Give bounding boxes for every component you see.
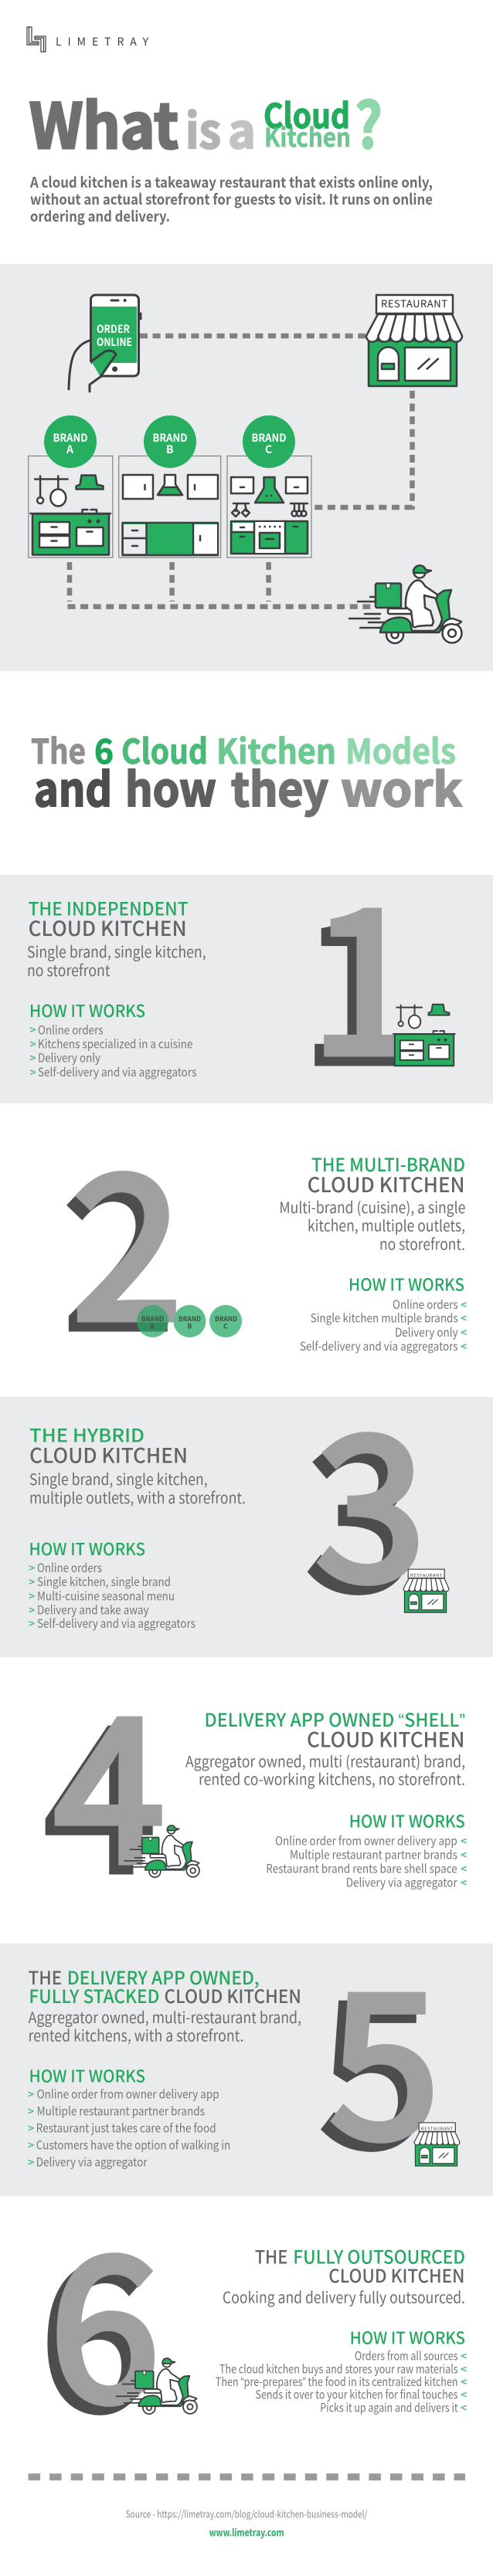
how it works list: < [461,2361,467,2377]
number 1: 1 [301,832,411,1120]
heading: delivery app owned shell: DELIVERY APP OWNED “SHELL” [204,1705,465,1732]
how it works list: < [461,1833,467,1849]
number 3: 3 [306,1359,416,1647]
how it works list: > [29,1022,36,1038]
how it works list: HOW IT WORKS [350,2324,465,2349]
title: What is a Cloud Kitchen?: ? [355,75,382,167]
description: Single brand, single kitchen, [27,940,206,962]
how it works list [266,1808,467,1890]
icon: restaurant [403,1569,449,1612]
how it works list: Online order from owner delivery app [275,1832,457,1849]
how it works list: < [461,1325,467,1341]
brand badges: B [187,1322,192,1331]
heading: multi-brand: THE MULTI-BRAND [311,1150,465,1177]
how it works list: > [28,2086,34,2102]
heading: multi-brand: CLOUD KITCHEN [308,1168,465,1198]
how it works list: > [28,2155,34,2171]
how it works list: Delivery only [395,1324,458,1341]
icon: delivery scooter [117,2358,197,2414]
heading: The 6 Cloud Kitchen Models and how they work: Kitchen [216,724,336,774]
intro paragraph: A cloud kitchen is a takeaway restaurant that exists online only, [29,171,433,192]
website link: www.limetray.com [209,2524,284,2539]
intro paragraph: ordering and delivery. [30,205,170,226]
how it works list: Picks it up again and delivers it [320,2398,458,2415]
number 2: 2 [63,1098,174,1386]
how it works list: HOW IT WORKS [349,1808,465,1833]
brand badges: A [150,1322,155,1331]
heading: fully outsourced [255,2242,465,2288]
brand badge B [144,415,196,468]
brand badge C: BRAND [252,430,286,446]
how it works list: Customers have the option of walking in [36,2136,230,2153]
how it works list [29,998,196,1080]
panel: model 4 [45,1632,467,1929]
brand badges: BRAND [178,1314,201,1324]
title: What is a Cloud Kitchen?: What [29,77,178,167]
heading: fully outsourced: THE [255,2242,287,2269]
how it works list: < [461,1862,467,1877]
how it works list: > [28,2137,34,2153]
how it works list: HOW IT WORKS [29,998,145,1022]
source line: Source - https://limetray.com/blog/cloud-kitchen-business-model/ [126,2507,367,2521]
number 2: 2 [72,1089,182,1377]
description: multiple outlets, with a storefront. [29,1486,246,1508]
heading: delivery app owned shell [204,1705,465,1753]
how it works list: > [29,1065,36,1080]
title: What is a Cloud Kitchen?: Cloud [264,89,350,138]
heading: hybrid: CLOUD KITCHEN [29,1439,188,1469]
icon: restaurant: RESTAURANT [421,2125,454,2131]
brand badge C: C [265,442,272,457]
intro paragraph [29,171,433,226]
how it works list: Kitchens specialized in a cuisine [38,1035,193,1052]
how it works list: < [461,2400,467,2415]
heading: delivery app owned fully stacked [29,1963,301,2008]
how it works list: Multiple restaurant partner brands [290,1846,457,1863]
description [29,1467,246,1508]
how it works list: Restaurant just takes care of the food [36,2120,216,2137]
panel: model 2 [63,1089,467,1386]
number 4: 4 [45,1641,155,1929]
how it works list: > [29,1588,35,1604]
description: rented kitchens, with a storefront. [29,2023,243,2046]
heading: delivery app owned fully stacked: CLOUD KITCHEN [164,1981,301,2008]
how it works list: Online orders [37,1559,102,1576]
heading: independent [29,894,189,942]
how it works list: Self-delivery and via aggregators [300,1337,458,1354]
how it works list: Self-delivery and via aggregators [38,1063,196,1080]
how it works list: < [461,2374,467,2390]
brand badge B: BRAND [153,430,187,446]
how it works list [300,1272,467,1354]
how it works list: Online orders [393,1296,458,1313]
number 6: 6 [40,2179,151,2467]
how it works list: > [29,1602,35,1618]
heading: The 6 Cloud Kitchen Models and how they work: Cloud [121,724,208,774]
heading: independent: CLOUD KITCHEN [29,912,187,942]
description [29,2005,301,2046]
how it works list: Single kitchen multiple brands [311,1310,458,1327]
how it works list: Single kitchen, single brand [37,1573,171,1590]
heading: The 6 Cloud Kitchen Models and how they work: 6 [94,724,114,774]
heading: multi-brand [308,1150,465,1198]
how it works list: Delivery via aggregator [346,1873,458,1890]
brand badges: BRAND [141,1314,164,1324]
description [185,1749,465,1790]
description: no storefront [27,958,110,981]
how it works list: HOW IT WORKS [29,1536,145,1561]
description: Aggregator owned, multi (restaurant) brand, [185,1749,465,1771]
title: What is a Cloud Kitchen?: Kitchen [264,117,351,154]
number 5: 5 [329,1907,440,2195]
kitchen B [119,456,221,558]
heading: The 6 Cloud Kitchen Models and how they work: they [231,753,328,820]
how it works list: HOW IT WORKS [348,1272,464,1296]
icon: delivery scooter [349,565,462,643]
panel: model 1 [0,823,493,1120]
how it works list: > [29,1036,36,1052]
how it works list: > [29,1050,36,1066]
description: Single brand, single kitchen, [29,1467,208,1490]
how it works list: Online order from owner delivery app [37,2085,219,2102]
panel: model 6 [40,2171,467,2467]
icon: delivery scooter [124,1825,199,1877]
heading: The 6 Cloud Kitchen Models and how they work: work [341,753,462,820]
arrow: phone to restaurant [140,334,366,338]
how it works list [29,1536,196,1632]
brand badges: C [223,1322,228,1331]
number 1: 1 [310,823,420,1111]
how it works list: < [461,1847,467,1863]
description: Aggregator owned, multi-restaurant brand, [29,2005,301,2028]
title: What is a Cloud Kitchen? [29,75,382,167]
heading: The 6 Cloud Kitchen Models and how they work: and [34,753,112,820]
heading: The 6 Cloud Kitchen Models and how they work: The [31,724,86,774]
how it works list: < [461,2349,467,2364]
description: Cooking and delivery fully outsourced. [223,2285,465,2307]
icon: restaurant storefront [366,295,462,386]
heading: delivery app owned fully stacked: FULLY STACKED [29,1981,159,2008]
kitchen A [29,456,113,558]
how it works list: < [461,1297,467,1313]
icon: restaurant: RESTAURANT [410,1572,443,1578]
how it works list [216,2324,467,2415]
logo: LimeTray: LIMETRAY [56,34,149,49]
how it works list: > [29,1574,35,1590]
icon: phone ordering online: ORDER [97,321,130,337]
how it works list: Orders from all sources [355,2347,458,2364]
how it works list: < [461,1339,467,1354]
kitchen C [227,456,311,558]
logo: LimeTray [27,27,149,52]
how it works list: Then “pre-prepares” the food in its centralized kitchen [216,2373,458,2390]
how it works list: Self-delivery and via aggregators [37,1615,196,1632]
number 4: 4 [54,1632,165,1920]
heading: The 6 Cloud Kitchen Models and how they work [31,724,462,820]
panel: how a cloud kitchen works [0,264,493,671]
description [279,1195,465,1255]
brand badge A [44,415,97,468]
number 3: 3 [315,1350,426,1638]
how it works list: > [28,2121,34,2137]
footer divider [29,2473,465,2480]
how it works list: HOW IT WORKS [29,2063,145,2088]
icon: restaurant [414,2123,460,2166]
icon: phone ordering online [68,295,141,391]
arrow: kitchens to delivery [68,562,372,607]
heading: delivery app owned fully stacked: THE [29,1963,62,1990]
how it works list: Delivery and take away [37,1601,148,1618]
brand badge A: BRAND [53,430,88,446]
brand badge B: B [166,442,174,457]
heading: hybrid [29,1421,188,1469]
how it works list: > [29,1616,35,1632]
title: What is a Cloud Kitchen?: is [185,93,221,162]
heading: The 6 Cloud Kitchen Models and how they work: Models [345,724,456,774]
description [27,940,206,981]
how it works list: < [461,2388,467,2403]
heading: hybrid: THE HYBRID [29,1421,144,1448]
title: What is a Cloud Kitchen?: a [228,93,256,162]
icon: restaurant storefront: RESTAURANT [381,296,447,310]
how it works list: < [461,1875,467,1890]
heading: The 6 Cloud Kitchen Models and how they work: how [125,753,216,820]
icon: phone ordering online: ONLINE [97,334,132,350]
heading: delivery app owned fully stacked: DELIVERY APP OWNED, [67,1963,260,1990]
description: kitchen, multiple outlets, [308,1214,465,1236]
panel: model 5 [0,1907,493,2204]
how it works list: Delivery only [38,1049,100,1066]
description: Multi-brand (cuisine), a single [279,1195,465,1218]
how it works list: > [29,1561,35,1576]
arrow: restaurant to kitchens [313,391,413,510]
brand badge A: A [66,442,74,457]
heading: delivery app owned shell: CLOUD KITCHEN [307,1723,465,1753]
number 6: 6 [49,2171,160,2459]
how it works list: > [28,2104,34,2120]
how it works list: < [461,1311,467,1327]
description: rented co-working kitchens, no storefront. [199,1768,465,1790]
panel: model 3 [0,1350,493,1657]
icon: kitchen [393,1005,455,1066]
intro paragraph: without an actual storefront for guests to visit. It runs on online [30,188,433,209]
how it works list: Delivery via aggregator [36,2154,148,2171]
description: no storefront. [379,1232,465,1255]
how it works list: Multiple restaurant partner brands [37,2103,205,2120]
how it works list: Restaurant brand rents bare shell space [266,1860,457,1877]
how it works list: Multi-cuisine seasonal menu [37,1587,175,1604]
heading: fully outsourced: FULLY OUTSOURCED [293,2242,465,2269]
brand badges: BRAND [215,1314,237,1324]
brand badge C [243,415,295,468]
how it works list [28,2063,230,2171]
heading: fully outsourced: CLOUD KITCHEN [328,2261,465,2288]
heading: independent: THE INDEPENDENT [29,894,189,921]
brand badges [137,1305,242,1337]
how it works list: Online orders [38,1021,104,1038]
number 5: 5 [320,1916,430,2204]
